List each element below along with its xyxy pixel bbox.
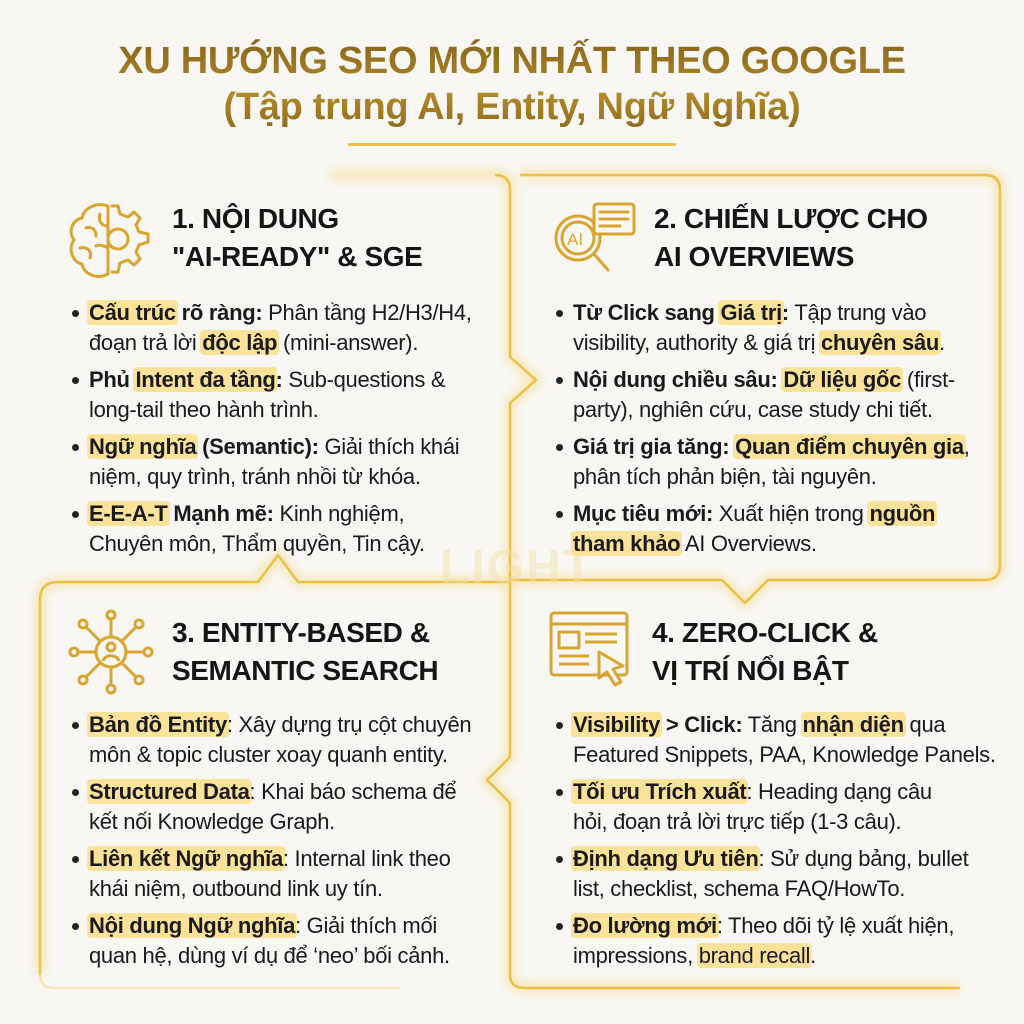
bullets: phân tích phản biện, tài nguyên. xyxy=(573,464,877,489)
bullets xyxy=(556,300,970,556)
watermark: LIGHT xyxy=(440,541,594,594)
bullets: long-tail theo hành trình. xyxy=(89,397,318,422)
bullets: Ngữ nghĩa (Semantic): Giải thích khái xyxy=(89,434,459,459)
bullets: Mục tiêu mới: Xuất hiện trong nguồn xyxy=(573,501,935,526)
bullets: Từ Click sang Giá trị: Tập trung vào xyxy=(573,300,926,325)
heading: "AI-READY" & SGE xyxy=(172,241,422,272)
bullets: Giá trị gia tăng: Quan điểm chuyên gia, xyxy=(573,434,970,459)
bullets: Nội dung chiều sâu: Dữ liệu gốc (first- xyxy=(573,367,955,392)
heading: 1. NỘI DUNG xyxy=(172,203,339,234)
icon: AI magnifier: AI xyxy=(567,230,583,249)
bullets: kết nối Knowledge Graph. xyxy=(89,809,335,834)
bullets: quan hệ, dùng ví dụ để ‘neo’ bối cảnh. xyxy=(89,943,450,968)
heading: 2. CHIẾN LƯỢC CHO xyxy=(654,203,928,234)
bullets: Đo lường mới: Theo dõi tỷ lệ xuất hiện, xyxy=(573,913,954,938)
panel: 2 AI overviews xyxy=(554,202,970,556)
bullets xyxy=(556,712,996,968)
icon: network xyxy=(68,610,154,694)
bullets: Structured Data: Khai báo schema để xyxy=(89,779,456,804)
bullets: niệm, quy trình, tránh nhồi từ khóa. xyxy=(89,464,421,489)
bullets: Tối ưu Trích xuất: Heading dạng câu xyxy=(573,779,932,804)
icon: brain gear xyxy=(70,203,150,278)
bullets: party), nghiên cứu, case study chi tiết. xyxy=(573,397,933,422)
bullets: Phủ Intent đa tầng: Sub-questions & xyxy=(89,367,445,392)
panel: 1 AI-ready xyxy=(70,203,472,556)
panel: 4 zero-click xyxy=(550,612,996,968)
heading xyxy=(652,617,878,686)
title: (Tập trung AI, Entity, Ngữ Nghĩa) xyxy=(223,86,800,128)
bullets: Cấu trúc rõ ràng: Phân tầng H2/H3/H4, xyxy=(89,300,472,325)
bullets: môn & topic cluster xoay quanh entity. xyxy=(89,742,448,767)
bullets xyxy=(72,300,472,556)
icon: browser cursor xyxy=(550,612,628,686)
heading xyxy=(654,203,928,272)
bullets: Bản đồ Entity: Xây dựng trụ cột chuyên xyxy=(89,712,471,737)
bullets: Liên kết Ngữ nghĩa: Internal link theo xyxy=(89,846,451,871)
bullets: hỏi, đoạn trả lời trực tiếp (1-3 câu). xyxy=(573,809,901,834)
bullets: Định dạng Ưu tiên: Sử dụng bảng, bullet xyxy=(573,846,968,871)
bullets: Visibility > Click: Tăng nhận diện qua xyxy=(573,712,945,737)
bullets: visibility, authority & giá trị chuyên sâu. xyxy=(573,330,945,355)
bullets: Nội dung Ngữ nghĩa: Giải thích mối xyxy=(89,913,437,938)
bullets: Chuyên môn, Thẩm quyền, Tin cậy. xyxy=(89,531,425,556)
heading xyxy=(172,203,422,272)
heading xyxy=(172,617,438,686)
heading: VỊ TRÍ NỔI BẬT xyxy=(652,655,849,686)
heading: 4. ZERO-CLICK & xyxy=(652,617,878,648)
heading: SEMANTIC SEARCH xyxy=(172,655,438,686)
icon: AI magnifier xyxy=(554,202,636,272)
bullets: khái niệm, outbound link uy tín. xyxy=(89,876,383,901)
bullets: E-E-A-T Mạnh mẽ: Kinh nghiệm, xyxy=(89,501,404,526)
bullets: impressions, brand recall. xyxy=(573,943,816,968)
panel: 3 entity xyxy=(68,610,471,968)
bullets xyxy=(72,712,471,968)
bullets: list, checklist, schema FAQ/HowTo. xyxy=(573,876,905,901)
heading: 3. ENTITY-BASED & xyxy=(172,617,430,648)
bullets: Featured Snippets, PAA, Knowledge Panels. xyxy=(573,742,996,767)
bullets: tham khảo AI Overviews. xyxy=(573,531,817,556)
title: XU HƯỚNG SEO MỚI NHẤT THEO GOOGLE xyxy=(118,40,906,82)
title underline xyxy=(348,143,676,146)
title xyxy=(0,38,1024,130)
heading: AI OVERVIEWS xyxy=(654,241,854,272)
bullets: đoạn trả lời độc lập (mini-answer). xyxy=(89,330,418,355)
